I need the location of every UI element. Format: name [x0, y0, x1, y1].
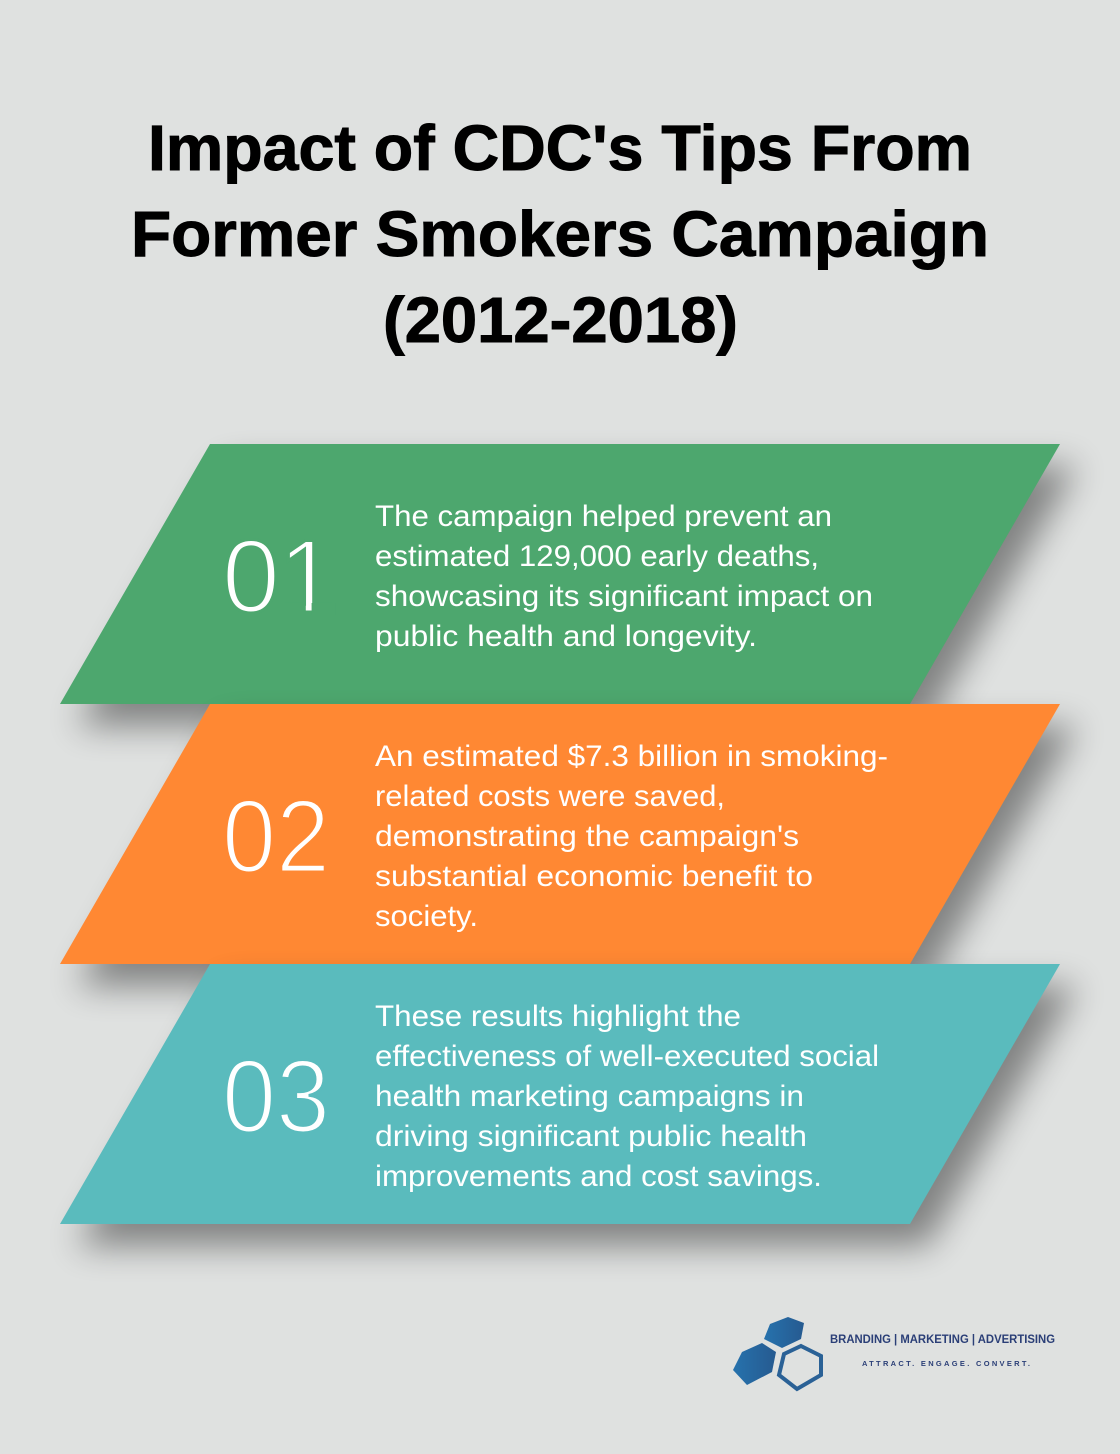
logo: [733, 1317, 1055, 1389]
title: [131, 112, 989, 356]
text block: step 03: health marketing campaigns in: [375, 1080, 804, 1113]
text block: step 02: substantial economic benefit to: [375, 860, 813, 893]
text block: step 03: driving significant public health: [375, 1120, 807, 1153]
number 02: 02: [222, 779, 330, 895]
text block: step 03: These results highlight the: [375, 1000, 741, 1033]
number 03: 03: [222, 1039, 330, 1155]
number 01: 0: [222, 519, 280, 635]
title: Former Smokers Campaign: [131, 198, 989, 270]
title: (2012-2018): [383, 284, 738, 356]
panel: step 01 early deaths prevented: [60, 444, 1077, 726]
number 01: [222, 519, 336, 635]
number 01: 1: [278, 519, 336, 635]
text block: step 01: estimated 129,000 early deaths,: [375, 540, 819, 573]
panel: step 03 effectiveness: [60, 964, 1077, 1246]
text block: step 01: [375, 500, 873, 653]
text block: step 02: [375, 740, 888, 933]
text block: step 02: related costs were saved,: [375, 780, 725, 813]
text block: step 03: [375, 1000, 879, 1193]
text block: step 01: The campaign helped prevent an: [375, 500, 832, 533]
panel: step 02 costs saved: [60, 704, 1077, 986]
icon: hexagons: [733, 1317, 821, 1389]
text block: step 03: effectiveness of well-executed social: [375, 1040, 879, 1073]
logo text: ATTRACT. ENGAGE. CONVERT.: [862, 1359, 1030, 1368]
green parallelogram: [60, 444, 1060, 704]
text block: step 02: An estimated $7.3 billion in smoking-: [375, 740, 888, 773]
orange parallelogram: [60, 704, 1060, 964]
text block: step 01: showcasing its significant impact on: [375, 580, 873, 613]
teal parallelogram: [60, 964, 1060, 1224]
logo text: [830, 1334, 1055, 1368]
logo text: BRANDING | MARKETING | ADVERTISING: [830, 1334, 1055, 1346]
text block: step 03: improvements and cost savings.: [375, 1160, 822, 1193]
text block: step 02: society.: [375, 900, 478, 933]
text block: step 01: public health and longevity.: [375, 620, 757, 653]
title: Impact of CDC's Tips From: [148, 112, 972, 184]
text block: step 02: demonstrating the campaign's: [375, 820, 799, 853]
